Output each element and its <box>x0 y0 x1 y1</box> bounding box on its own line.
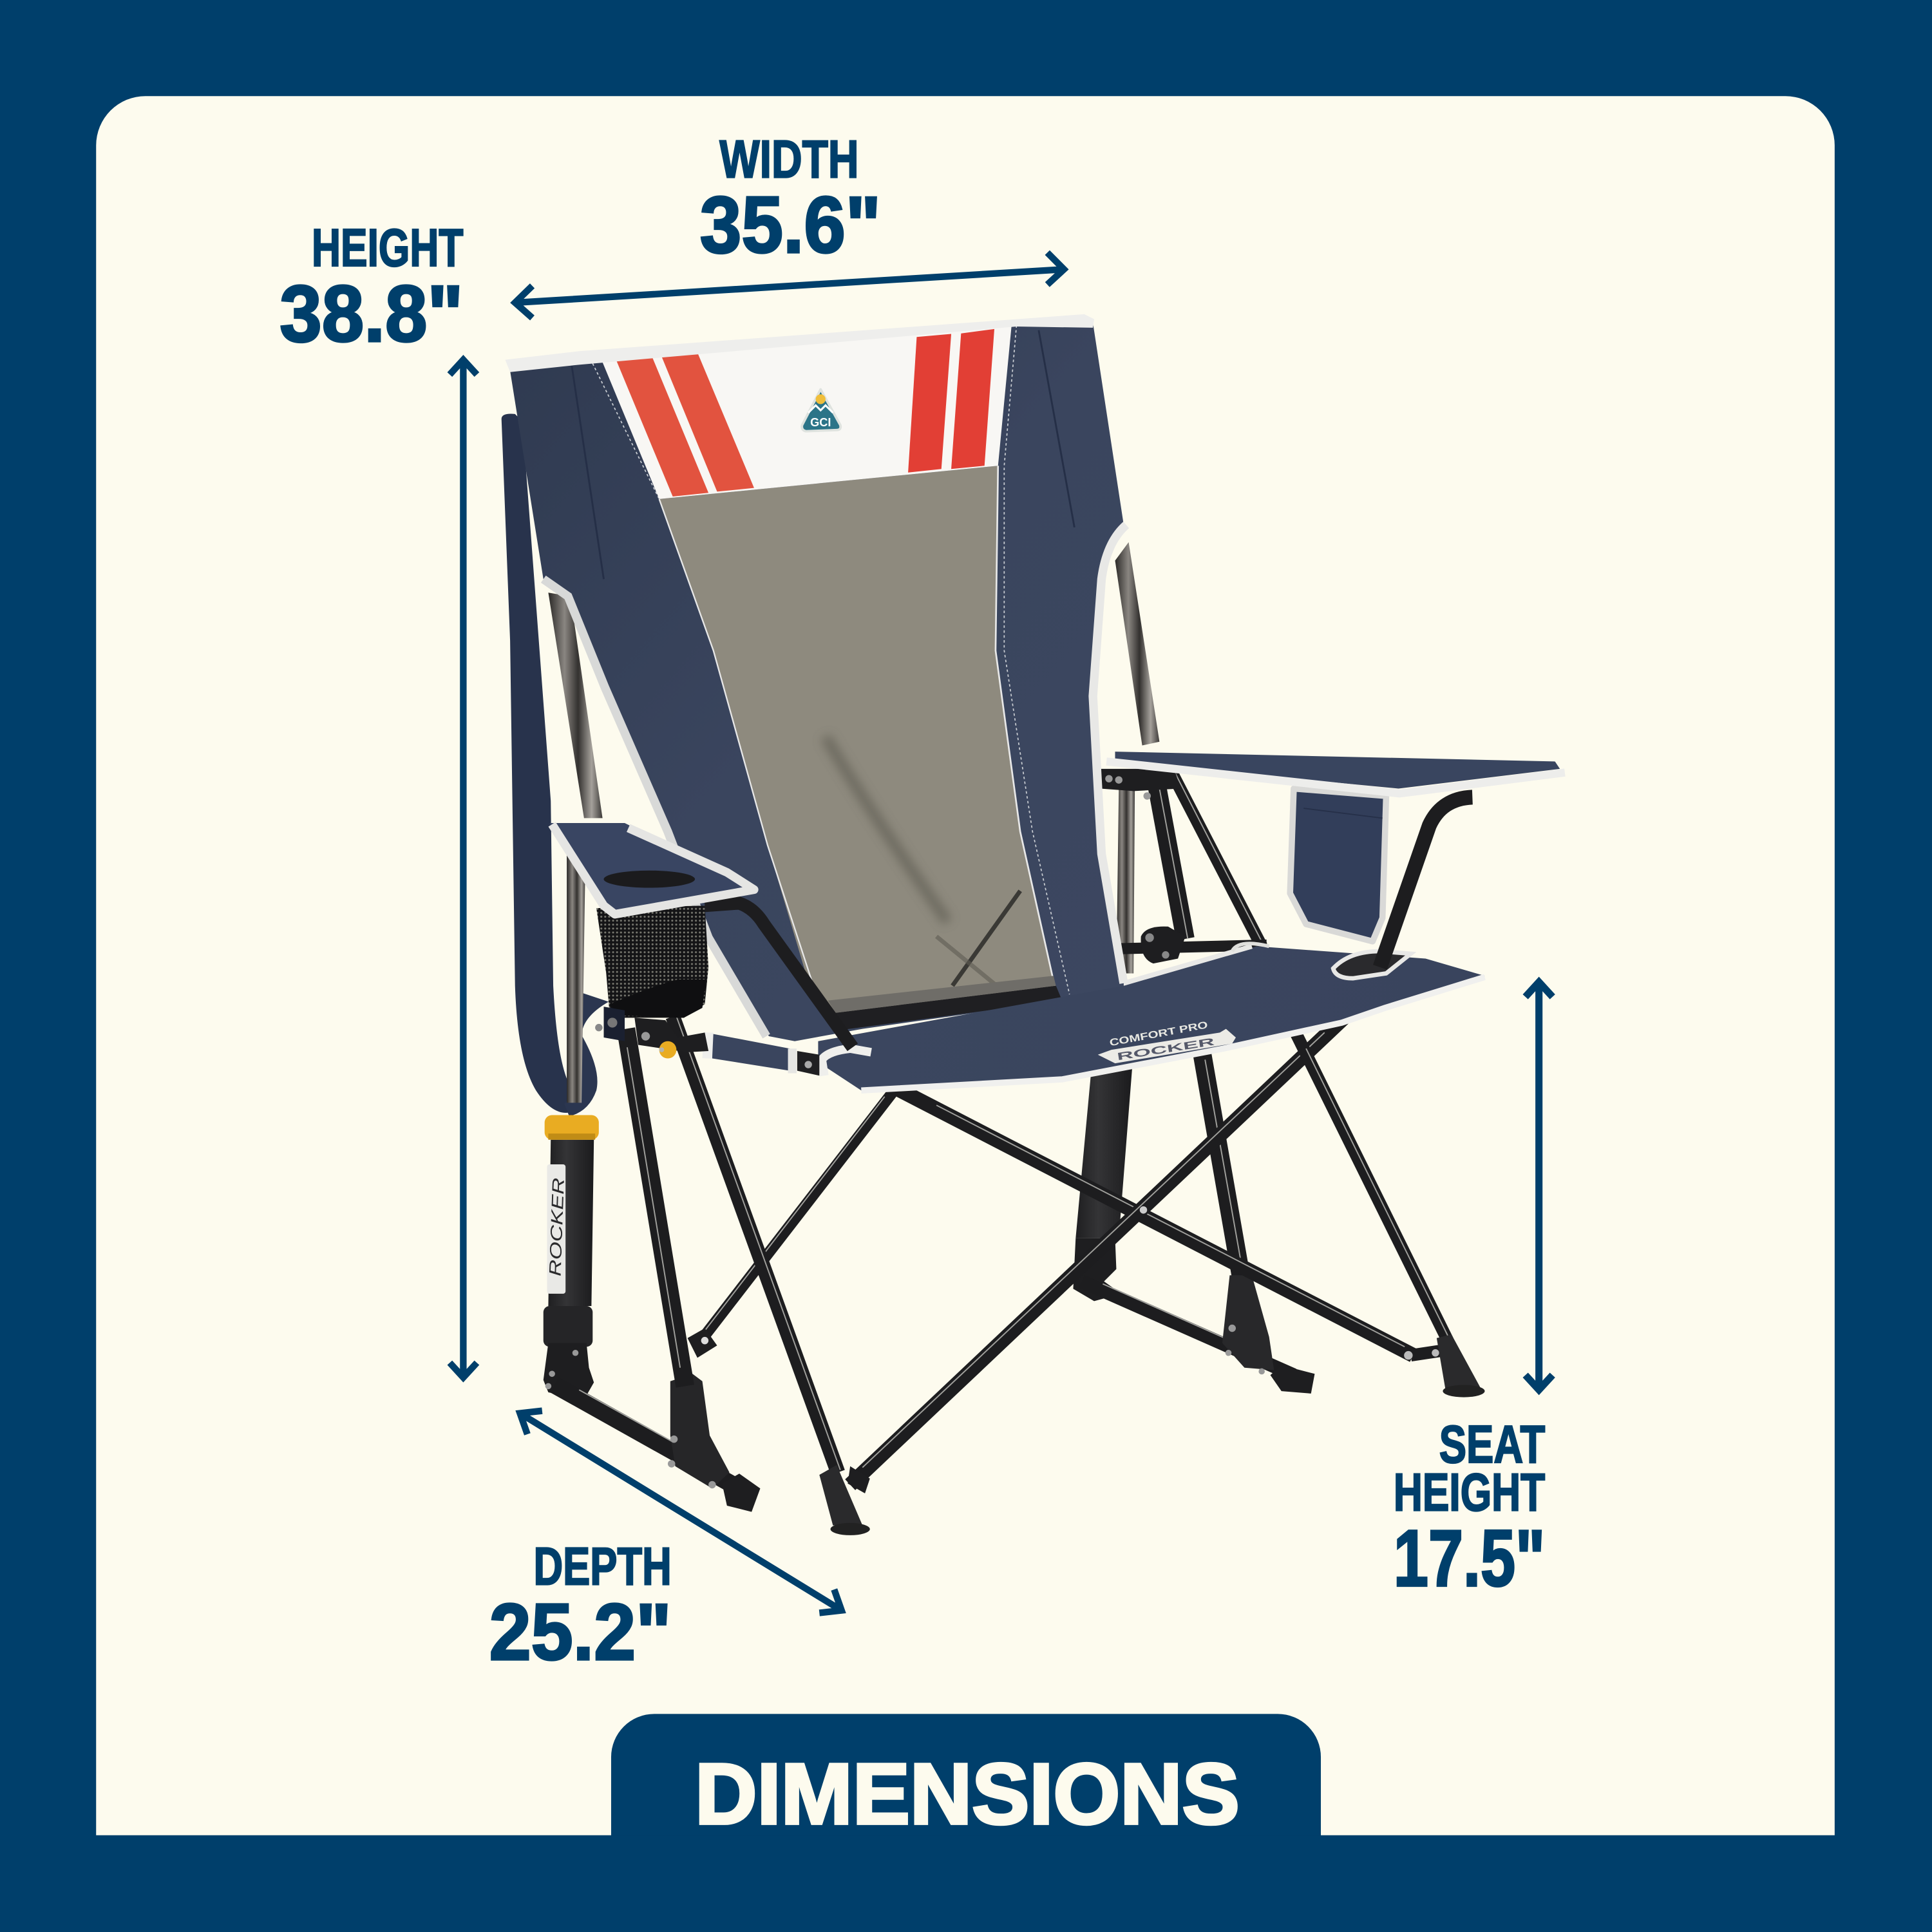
seat height label: HEIGHT <box>1394 1464 1545 1522</box>
depth label: DEPTH <box>533 1537 672 1596</box>
carry strap <box>502 414 609 1116</box>
back fabric <box>510 323 1126 1041</box>
seat frame joints <box>595 1007 819 1075</box>
logo <box>802 390 840 431</box>
mesh back panel <box>659 466 1062 1030</box>
dimension: depth <box>489 1411 842 1677</box>
cup holder <box>604 871 695 888</box>
chrome back tubes, right <box>1101 542 1267 973</box>
depth arrow <box>520 1411 842 1613</box>
chair product illustration <box>502 314 1565 1535</box>
rear rocker post and rail <box>1073 1035 1314 1394</box>
mesh shadow <box>826 737 947 922</box>
width arrow <box>515 252 1064 318</box>
left rail and foot <box>554 1374 760 1512</box>
front right leg <box>1294 1029 1484 1397</box>
seat slot <box>1333 951 1411 978</box>
center front leg <box>673 1016 870 1535</box>
logo: GCI <box>810 416 831 429</box>
rocker label: ROCKER <box>547 1177 568 1276</box>
seat height arrow <box>1526 982 1553 1390</box>
depth value: 25.2" <box>489 1587 672 1677</box>
left armrest <box>549 823 758 914</box>
white top panel <box>603 325 1012 499</box>
seat height label <box>1394 1416 1545 1522</box>
right arm support <box>1380 797 1472 967</box>
right armrest pocket <box>1290 788 1386 942</box>
yellow peg <box>659 1041 676 1058</box>
stitching <box>592 363 819 994</box>
dimension: seat height <box>1394 982 1553 1603</box>
height value: 38.8" <box>279 269 463 359</box>
brand mark: COMFORT PRO <box>1108 1019 1209 1048</box>
front left leg <box>626 1029 685 1386</box>
left rocker post <box>544 1115 599 1399</box>
brand mark: ROCKER <box>1116 1036 1216 1063</box>
width value: 35.6" <box>700 180 881 270</box>
dimension: width <box>515 131 1064 318</box>
cup mesh holder <box>596 905 708 1018</box>
seat brace <box>688 1082 901 1358</box>
top trim <box>505 314 1094 372</box>
seat height value: 17.5" <box>1394 1513 1545 1603</box>
seat <box>707 943 1484 1090</box>
rocker label <box>547 1164 568 1294</box>
chrome back tubes, left <box>548 592 603 1103</box>
brand mark <box>1098 1019 1236 1063</box>
x brace <box>848 1013 1452 1493</box>
right armrest <box>1106 752 1565 793</box>
seat left strip <box>712 1034 790 1071</box>
dimension: height <box>279 219 477 1378</box>
tab title: DIMENSIONS <box>695 1747 1240 1842</box>
bottom tab <box>611 1714 1321 1842</box>
height label: HEIGHT <box>312 219 463 278</box>
red stripes <box>616 329 994 497</box>
height arrow <box>450 360 477 1378</box>
left arm tube <box>705 903 853 1047</box>
seat height label: SEAT <box>1439 1416 1545 1474</box>
width label: WIDTH <box>719 131 859 189</box>
